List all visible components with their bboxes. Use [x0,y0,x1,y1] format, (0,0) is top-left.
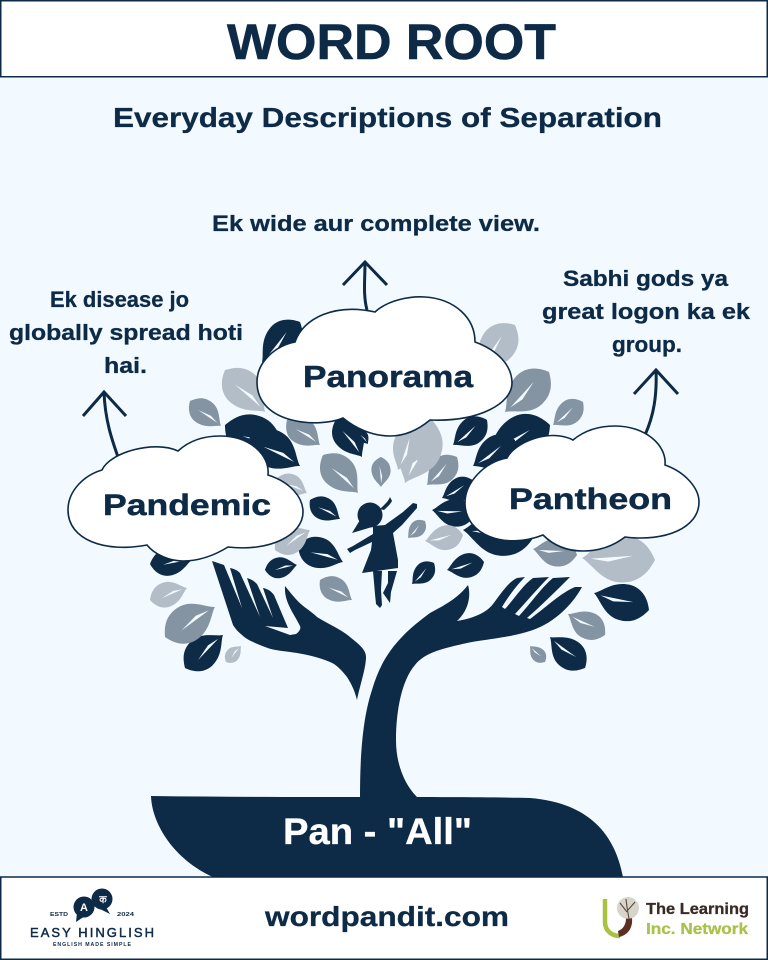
root label: Pan - "All" [283,811,472,852]
description: Pandemic: globally spread hoti [9,320,243,345]
arrow: Panorama [343,262,387,310]
logo: The Learning Inc. Network [605,897,749,938]
description: Panorama: Ek wide aur complete view. [212,211,540,236]
logo: Easy Hinglish [30,888,154,948]
subtitle: Everyday Descriptions of Separation [113,102,662,133]
logo: The Learning Inc. Network: The Learning [646,901,749,918]
arrow: Pantheon [634,370,678,435]
leaves of the tree [146,310,656,680]
title: WORD ROOT [227,14,556,70]
ground mound [151,796,623,877]
cloud: Panorama [257,297,512,436]
trunk and right hand [360,577,582,798]
description: Pantheon [542,266,751,357]
cloud: Pantheon: Pantheon [509,483,672,516]
left hand [212,561,366,700]
logo: Easy Hinglish: ESTD [50,912,68,918]
cloud: Pantheon [465,426,699,551]
description: Pandemic [9,287,243,378]
description: Pantheon: group. [612,332,682,357]
cloud: Pandemic: Pandemic [103,489,271,522]
description: Pantheon: Sabhi gods ya [563,266,729,291]
cloud: Pandemic [68,436,303,561]
description: Pantheon: great logon ka ek [542,299,751,324]
cloud: Panorama: Panorama [303,359,474,394]
girl silhouette [347,497,417,608]
description: Pandemic: Ek disease jo [50,287,189,312]
logo: Easy Hinglish: EASY HINGLISH [30,925,154,940]
website: wordpandit.com [264,901,509,932]
header bar [1,1,767,77]
logo: Easy Hinglish: क [98,893,107,909]
description: Pandemic: hai. [104,353,147,378]
logo: The Learning Inc. Network: Inc. Network [646,921,748,938]
logo: Easy Hinglish: 2024 [117,912,135,918]
logo: Easy Hinglish: A [80,902,88,914]
logo: Easy Hinglish: ENGLISH MADE SIMPLE [53,942,132,948]
footer bar [1,877,767,959]
arrow: Pandemic [83,392,126,457]
